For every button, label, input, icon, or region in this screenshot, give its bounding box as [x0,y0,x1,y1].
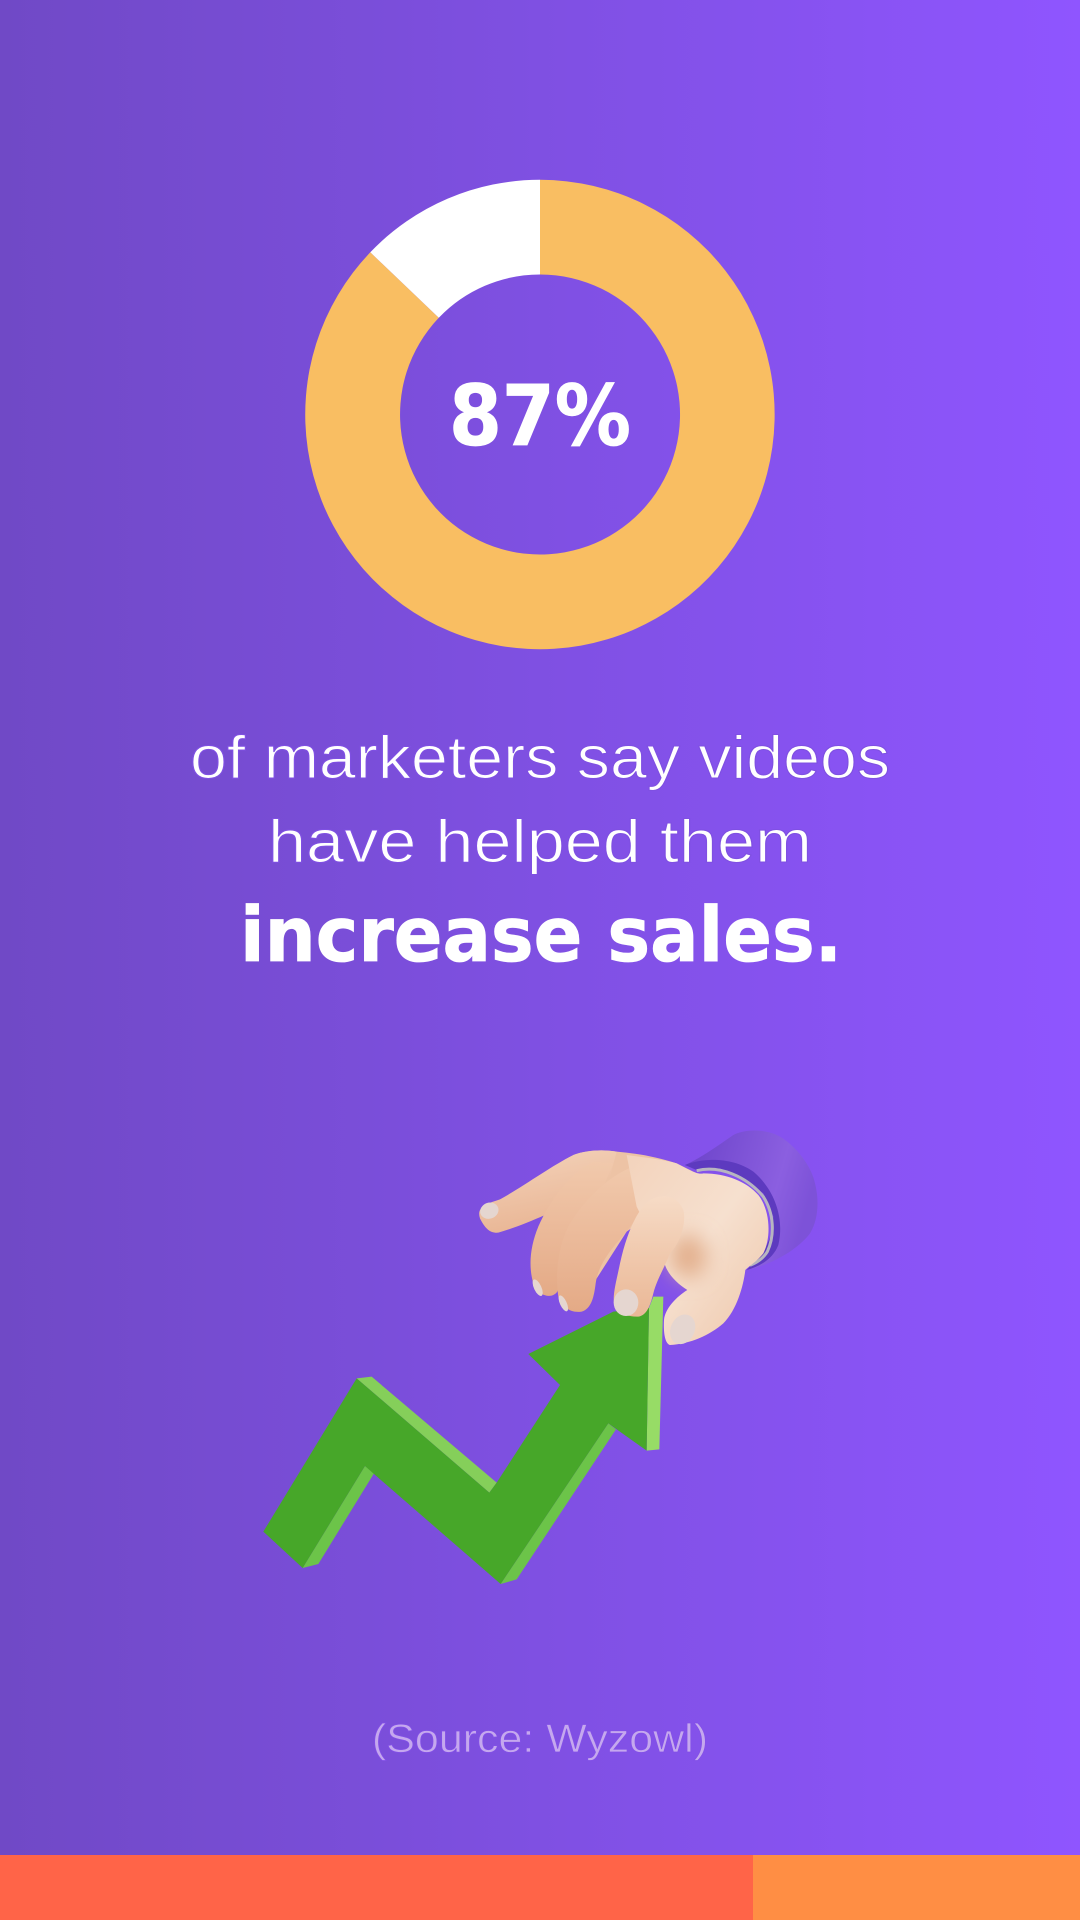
arrow front face [263,1308,649,1584]
index finger [479,1150,617,1233]
fingernails [478,1200,700,1348]
arrow lower side [501,1423,616,1584]
front fingernail [614,1289,638,1316]
shirt cuff [697,1169,772,1265]
middle fingernail [531,1278,545,1297]
shirt sleeve [685,1131,818,1270]
thumbnail [665,1310,700,1348]
front finger [614,1196,684,1317]
donut value label: 87% [449,367,631,465]
middle finger [531,1162,613,1296]
arrow head side highlight [647,1297,663,1451]
arrow top side highlight [357,1377,497,1493]
headline line 2: have helped them [268,808,812,875]
donut chart: 87% [305,180,775,649]
donut segment: 87 percent [305,180,775,649]
green zigzag arrow [263,1297,663,1584]
source note: (Source: Wyzowl) [372,1717,708,1761]
arrow tail lower side [303,1466,374,1568]
3D hand [478,1131,818,1348]
index fingernail [478,1200,501,1221]
footer bar: red segment [0,1855,753,1920]
back of hand base [538,1150,703,1280]
ring finger [557,1167,657,1312]
sleeve inner shadow [685,1160,780,1270]
footer bar: orange segment [753,1855,1080,1920]
headline line 1: of marketers say videos [190,724,890,791]
donut segment: remaining 13 percent [370,180,540,318]
headline text block [190,724,890,979]
palm shadow [670,1235,707,1278]
palm and thumb [627,1155,769,1345]
illustration: hand lifting green growth arrow [263,1131,818,1584]
ring fingernail [557,1294,570,1313]
headline emphasis: increase sales: increase sales. [240,890,842,979]
